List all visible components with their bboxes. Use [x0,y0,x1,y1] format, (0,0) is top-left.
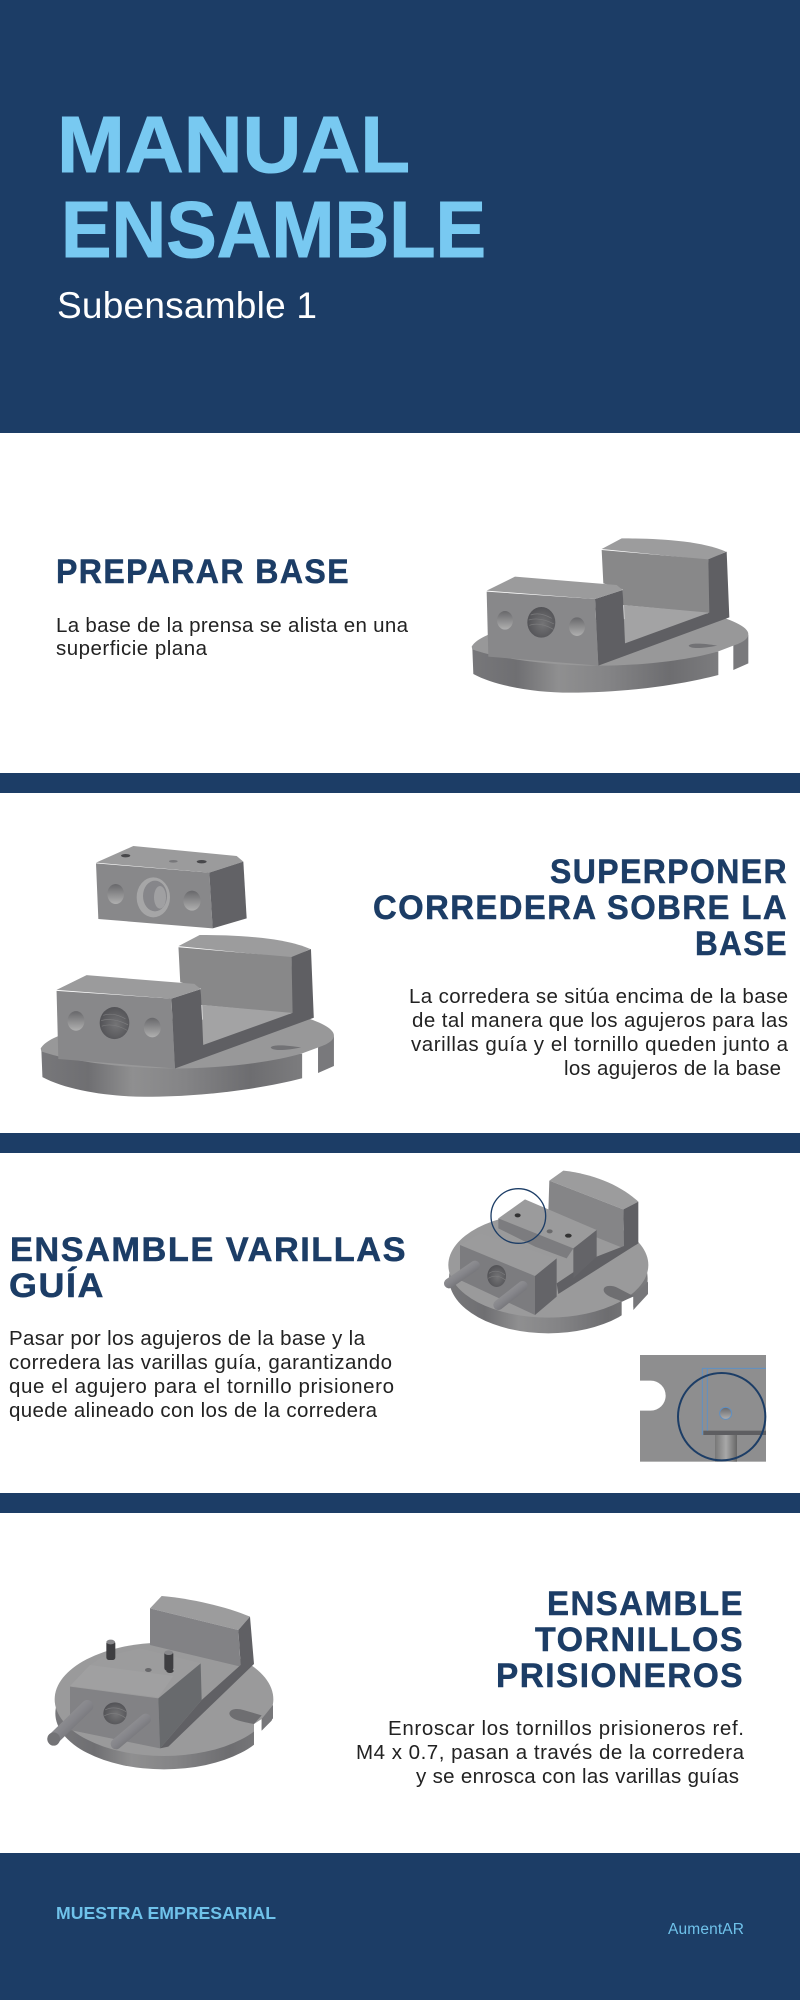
text block: preparar base: La base de la prensa se alista en una [56,614,409,637]
heading: preparar base: PREPARAR BASE [56,553,350,591]
text block: preparar base [56,614,409,660]
panel: ensamble varillas guia [9,1231,407,1422]
text block: ensamble tornillos: Enroscar los tornillos prisioneros ref. [388,1717,744,1740]
title: MANUAL [57,100,410,189]
text block: ensamble varillas: corredera las varillas guía, garantizando [9,1351,392,1374]
heading: superponer corredera [373,853,788,963]
divider band 3 [0,1493,800,1513]
image: varillas guia ensambladas [448,1171,653,1333]
heading: ensamble varillas: ENSAMBLE VARILLAS [10,1231,407,1269]
text block: superponer corredera: La corredera se sitúa encima de la base [409,985,788,1008]
text block: ensamble tornillos: M4 x 0.7, pasan a través de la corredera [356,1741,745,1764]
heading: ensamble tornillos: ENSAMBLE [547,1585,744,1623]
heading: ensamble tornillos: PRISIONEROS [496,1657,744,1695]
footer label: aumentar: AumentAR [668,1921,744,1938]
image: tornillos prisioneros ensamblados [47,1596,278,1769]
text block: ensamble tornillos: y se enrosca con las varillas guías [416,1765,739,1788]
text block: superponer corredera [409,985,789,1080]
corredera [96,846,247,928]
callout circle [678,1373,765,1460]
text block: ensamble varillas: quede alineado con los de la corredera [9,1399,378,1422]
divider band 1 [0,773,800,793]
footer label: muestra empresarial: MUESTRA EMPRESARIAL [56,1903,276,1923]
title [57,100,486,274]
panel: preparar base [56,553,409,660]
base [41,935,334,1097]
heading: ensamble varillas [9,1231,407,1305]
text block: superponer corredera: los agujeros de la base [564,1057,781,1080]
text block: ensamble varillas: que el agujero para el tornillo prisionero [9,1375,394,1398]
footer panel [0,1853,800,2000]
heading: superponer corredera: SUPERPONER [550,853,788,891]
panel: ensamble tornillos prisioneros [356,1585,745,1788]
heading: ensamble tornillos [496,1585,744,1695]
header panel [0,0,800,433]
heading: superponer corredera: CORREDERA SOBRE LA [373,889,788,927]
text block: superponer corredera: varillas guía y el tornillo queden junto a [411,1033,789,1056]
callout circle [491,1189,546,1243]
text block: preparar base: superficie plana [56,637,208,660]
text block: superponer corredera: de tal manera que los agujeros para las [412,1009,788,1032]
text block: ensamble varillas: Pasar por los agujeros de la base y la [9,1327,366,1350]
image: detalle agujero tornillo prisionero [640,1355,766,1462]
heading: ensamble tornillos: TORNILLOS [535,1621,744,1659]
text block: ensamble varillas [9,1327,394,1422]
subtitle: Subensamble 1 [57,285,317,326]
divider band 2 [0,1133,800,1153]
image: base de la prensa [472,538,748,693]
title: ENSAMBLE [61,185,486,274]
text block: ensamble tornillos [356,1717,745,1788]
image: corredera sobre la base [41,846,334,1097]
heading: ensamble varillas: GUÍA [9,1267,105,1305]
panel: superponer corredera [373,853,789,1080]
heading: superponer corredera: BASE [695,925,788,963]
